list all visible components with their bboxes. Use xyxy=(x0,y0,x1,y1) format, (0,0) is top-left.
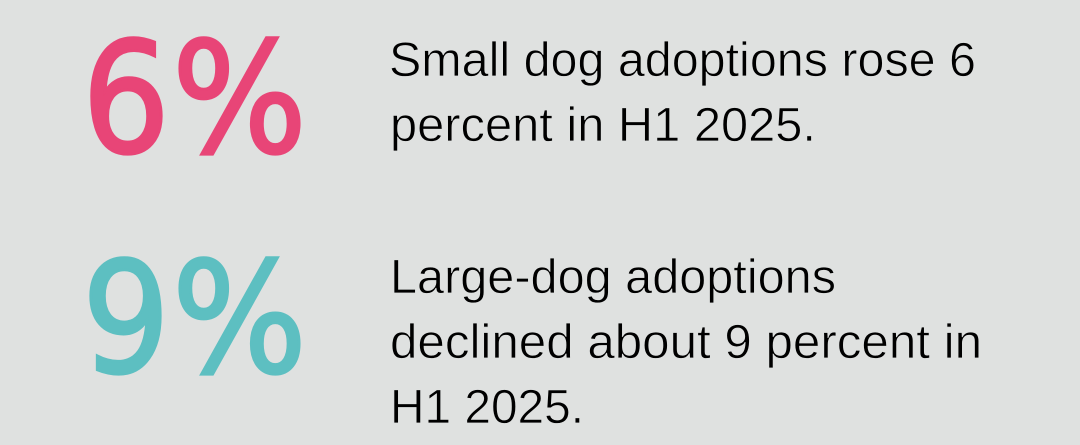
big number: 6% xyxy=(82,10,307,189)
text block: small dog description xyxy=(389,34,976,152)
stat block: small dog adoptions xyxy=(82,10,976,189)
text block: large dog description: declined about 9 percent in xyxy=(390,316,982,369)
big number: 9%: 9 xyxy=(82,230,170,409)
stat block: large dog adoptions xyxy=(82,230,982,434)
text block: large dog description: Large-dog adoptions xyxy=(390,251,836,304)
text block: large dog description xyxy=(390,251,982,434)
big number: 9% xyxy=(82,230,307,409)
big number: 6%: % xyxy=(172,10,307,189)
big number: 9%: % xyxy=(172,230,307,409)
text block: large dog description: H1 2025. xyxy=(390,381,584,434)
text block: small dog description: Small dog adoptions rose 6 xyxy=(389,34,976,87)
big number: 6%: 6 xyxy=(82,10,170,189)
text block: small dog description: percent in H1 2025. xyxy=(390,99,816,152)
